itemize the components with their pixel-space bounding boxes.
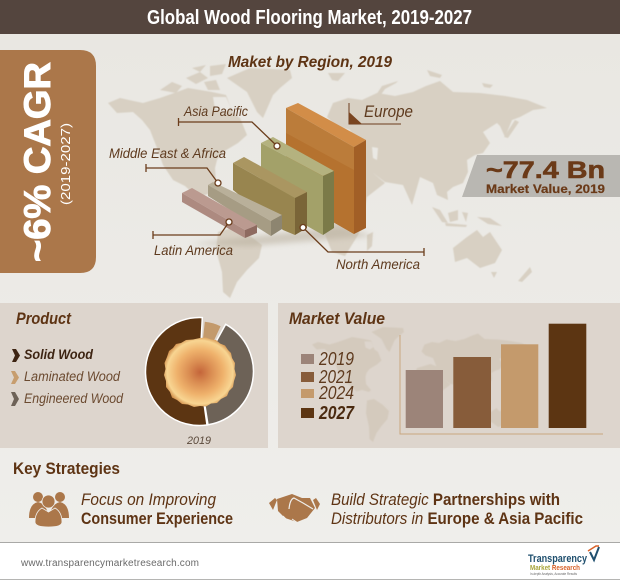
legend item: 2027: 2027 bbox=[318, 403, 355, 423]
callout: North America bbox=[300, 224, 424, 272]
heading: market value: Market Value bbox=[289, 309, 385, 328]
donut year: 2019 bbox=[186, 435, 211, 447]
bar: 2024 bbox=[501, 344, 538, 428]
strategy text: consumer experience: Focus on Improving bbox=[81, 491, 217, 509]
callout: North America: North America bbox=[336, 256, 420, 272]
segment: solid wood bbox=[145, 318, 207, 426]
bar: 2027 bbox=[549, 324, 586, 428]
title: Global Wood Flooring Market, 2019-2027 bbox=[147, 7, 472, 29]
logo bbox=[528, 546, 599, 576]
bar: North America bbox=[233, 157, 307, 235]
legend item: 2021: 2021 bbox=[318, 367, 353, 387]
3D bar chart by region bbox=[182, 103, 372, 246]
bar chart bbox=[400, 324, 603, 434]
item: laminated wood: Laminated Wood bbox=[24, 369, 120, 384]
icon: handshake bbox=[269, 494, 320, 523]
callout: Europe: Europe bbox=[364, 102, 413, 121]
legend item: 2024: 2024 bbox=[318, 383, 354, 403]
website: www.transparencymarketresearch.com bbox=[20, 558, 199, 569]
segment: laminated wood bbox=[200, 322, 221, 372]
bar: Latin America bbox=[182, 188, 257, 238]
bar: 2021 bbox=[453, 357, 491, 428]
legend bbox=[301, 349, 355, 423]
logo: In-depth Analysis, Accurate Results bbox=[530, 572, 577, 576]
value caption: Market Value, 2019 bbox=[486, 184, 605, 196]
CAGR period: (2019-2027) bbox=[58, 123, 73, 205]
callout: Latin America bbox=[153, 219, 233, 258]
strategy text: partnerships: Build Strategic Partnerships with bbox=[331, 491, 560, 509]
item: solid wood: Solid Wood bbox=[24, 347, 94, 362]
callout: Asia Pacific bbox=[178, 103, 280, 149]
CAGR value: ~6% CAGR bbox=[17, 62, 58, 262]
bar: 2019 bbox=[406, 370, 443, 428]
heading: key strategies: Key Strategies bbox=[13, 459, 120, 478]
panel: product bbox=[0, 303, 268, 448]
strategy text: partnerships bbox=[331, 491, 583, 528]
bar: Asia Pacific bbox=[261, 137, 334, 235]
segment: engineered wood bbox=[200, 324, 253, 425]
donut chart bbox=[145, 318, 253, 426]
bar: Europe bbox=[286, 103, 366, 234]
strategy text: consumer experience bbox=[81, 491, 233, 528]
callout: Europe bbox=[349, 102, 413, 124]
callout: Middle East and Africa: Middle East & Africa bbox=[109, 145, 226, 161]
value: ~77.4 Bn bbox=[486, 157, 605, 184]
panel: CAGR bbox=[0, 50, 96, 273]
strategy text: consumer experience: Consumer Experience bbox=[81, 510, 233, 528]
callout: Asia Pacific: Asia Pacific bbox=[183, 103, 248, 119]
callout: Middle East and Africa bbox=[109, 145, 226, 186]
legend item: 2019: 2019 bbox=[318, 349, 354, 369]
header bar bbox=[0, 0, 620, 34]
logo: Transparency bbox=[528, 553, 588, 565]
product list bbox=[11, 347, 123, 406]
world map bbox=[108, 64, 547, 298]
panel: market value bbox=[278, 303, 620, 448]
faint map bbox=[312, 327, 532, 442]
icon: wood cross-section bbox=[164, 338, 236, 407]
icon: people bbox=[29, 492, 69, 527]
bar: Middle East and Africa bbox=[208, 182, 282, 236]
footer bbox=[0, 542, 620, 580]
logo: Market Research bbox=[530, 563, 580, 572]
heading: market by region: Maket by Region, 2019 bbox=[228, 54, 392, 71]
heading: product: Product bbox=[16, 309, 72, 328]
item: engineered wood: Engineered Wood bbox=[24, 391, 123, 406]
callout: Latin America: Latin America bbox=[154, 242, 233, 258]
callout: market value 2019 bbox=[462, 155, 620, 197]
strategy text: partnerships: Distributors in Europe & Asia Pacific bbox=[331, 510, 583, 528]
